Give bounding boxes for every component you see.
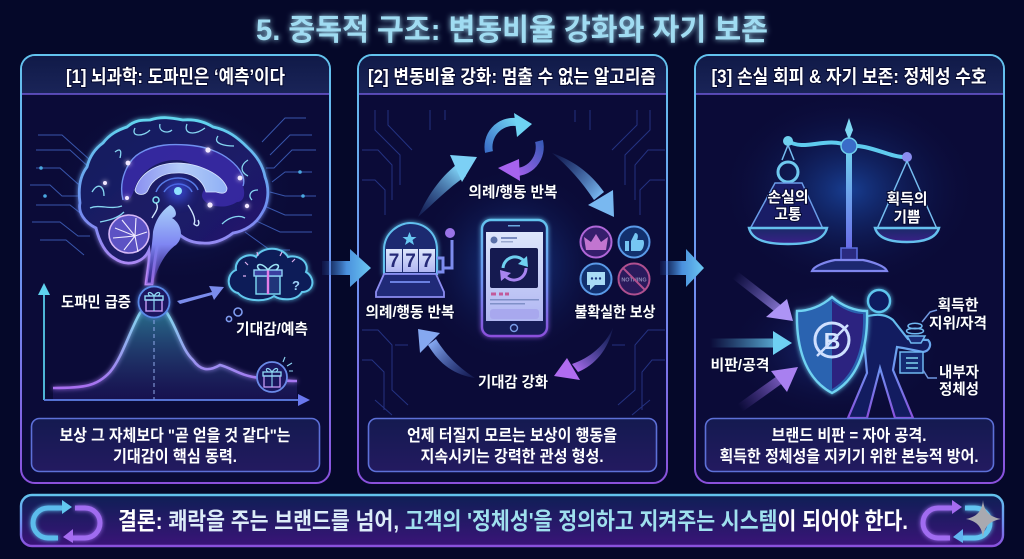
icon: slot machine: 7 [389, 251, 399, 272]
callout 2: 언제 터질지 모르는 보상이 행동을 [407, 425, 617, 445]
arrow: panel 2 to 3 [660, 249, 704, 287]
arrow: up-right [418, 155, 477, 217]
label: acquired status [929, 297, 987, 332]
icon: thought cloud gift [229, 249, 312, 300]
panel: variable ratio [358, 55, 667, 483]
label: ritual left: 의례/행동 반복 [366, 304, 455, 321]
axis: horizontal [44, 399, 300, 401]
icon: thought cloud gift: ? [292, 278, 300, 293]
arrow: down-left [554, 328, 613, 380]
label: ritual top: 의례/행동 반복 [468, 184, 558, 201]
label: insider identity [939, 364, 979, 398]
icon: loop left [33, 500, 100, 543]
label: pain of loss: 고통 [774, 206, 802, 223]
arrow: attack upper [735, 275, 793, 321]
arrow: down-right [552, 153, 614, 217]
arrow: attack middle [710, 331, 792, 355]
label: joy of gain: 기쁨 [894, 209, 921, 226]
icon: brain [79, 118, 268, 284]
chart: dopamine curve [38, 283, 310, 406]
panel 2 header [359, 56, 666, 94]
icon: scales [749, 118, 939, 271]
label: joy of gain [886, 191, 928, 226]
label: acquired status: 지위/자격 [929, 315, 987, 332]
icon: cycle [488, 113, 540, 181]
arrow: attack lower [740, 367, 798, 408]
label: joy of gain: 획득의 [886, 191, 928, 208]
panel 2 header: [2] 변동비율 강화: 멈출 수 없는 알고리즘 [368, 66, 656, 88]
panel 3 header: [3] 손실 회피 & 자기 보존: 정체성 수호 [712, 66, 986, 88]
label: insider identity: 내부자 [939, 364, 979, 381]
callout 3: 브랜드 비판 = 자아 공격. [772, 426, 926, 445]
conclusion bar [21, 495, 1003, 546]
conclusion text: 결론: 쾌락을 주는 브랜드를 넘어, 고객의 '정체성'을 정의하고 지켜주는 시스템이 되어야 한다. [118, 508, 908, 534]
icon: nothing: NOTHING [621, 278, 647, 284]
callout 1: 기대감이 핵심 동력. [113, 447, 237, 466]
panel: neuroscience [21, 55, 330, 483]
label: criticism: 비판/공격 [710, 357, 770, 374]
callout 1: 보상 그 자체보다 "곧 얻을 것 같다"는 [60, 426, 290, 445]
callout 3 [706, 418, 994, 472]
label: anticipation: 기대감/예측 [236, 321, 308, 338]
label: uncertain reward: 불확실한 보상 [574, 304, 656, 321]
label: pain of loss [768, 189, 808, 223]
icon: shield [797, 297, 867, 393]
panel 3 header [696, 56, 1003, 94]
icon: held status items [900, 310, 937, 378]
axis arrow up [38, 283, 50, 295]
callout 2: 지속시키는 강력한 관성 형성. [420, 447, 604, 466]
icon: chat [580, 264, 612, 294]
callout 2 [368, 418, 656, 472]
icon: thumbs up [618, 226, 650, 258]
arrow: gift to cloud [177, 286, 224, 304]
axis: vertical [43, 292, 45, 400]
icon: small gift [257, 357, 293, 392]
arrow: panel 1 to 2 [322, 249, 371, 287]
panel 1 header [22, 56, 329, 94]
icon: slot machine: 7 [405, 251, 416, 272]
arrow: up-left [418, 329, 475, 378]
label: expectation: 기대감 강화 [478, 374, 548, 391]
icon: loop right [923, 500, 1001, 543]
axis arrow right [298, 394, 310, 406]
icon: nothing [618, 264, 650, 294]
icon: person [848, 290, 930, 418]
panel 1 header: [1] 뇌과학: 도파민은 ‘예측’이다 [66, 66, 285, 88]
title: 5. 중독적 구조: 변동비율 강화와 자기 보존 [256, 14, 768, 47]
icon: slot machine: 7 [422, 251, 432, 272]
label: pain of loss: 손실의 [768, 189, 808, 206]
callout 1 [32, 418, 320, 472]
label: insider identity: 정체성 [939, 381, 979, 398]
label: dopamine surge: 도파민 급증 [61, 294, 131, 311]
icon: shield: B [824, 328, 840, 354]
icon: crown [580, 226, 612, 258]
callout 3: 획득한 정체성을 지키기 위한 본능적 방어. [720, 447, 978, 466]
thought bubbles [226, 308, 242, 322]
label: acquired status: 획득한 [938, 297, 979, 314]
icon: slot machine [376, 223, 455, 297]
icon: phone [482, 220, 547, 336]
panel: loss aversion [695, 55, 1004, 483]
icon: gift peak [138, 286, 170, 318]
